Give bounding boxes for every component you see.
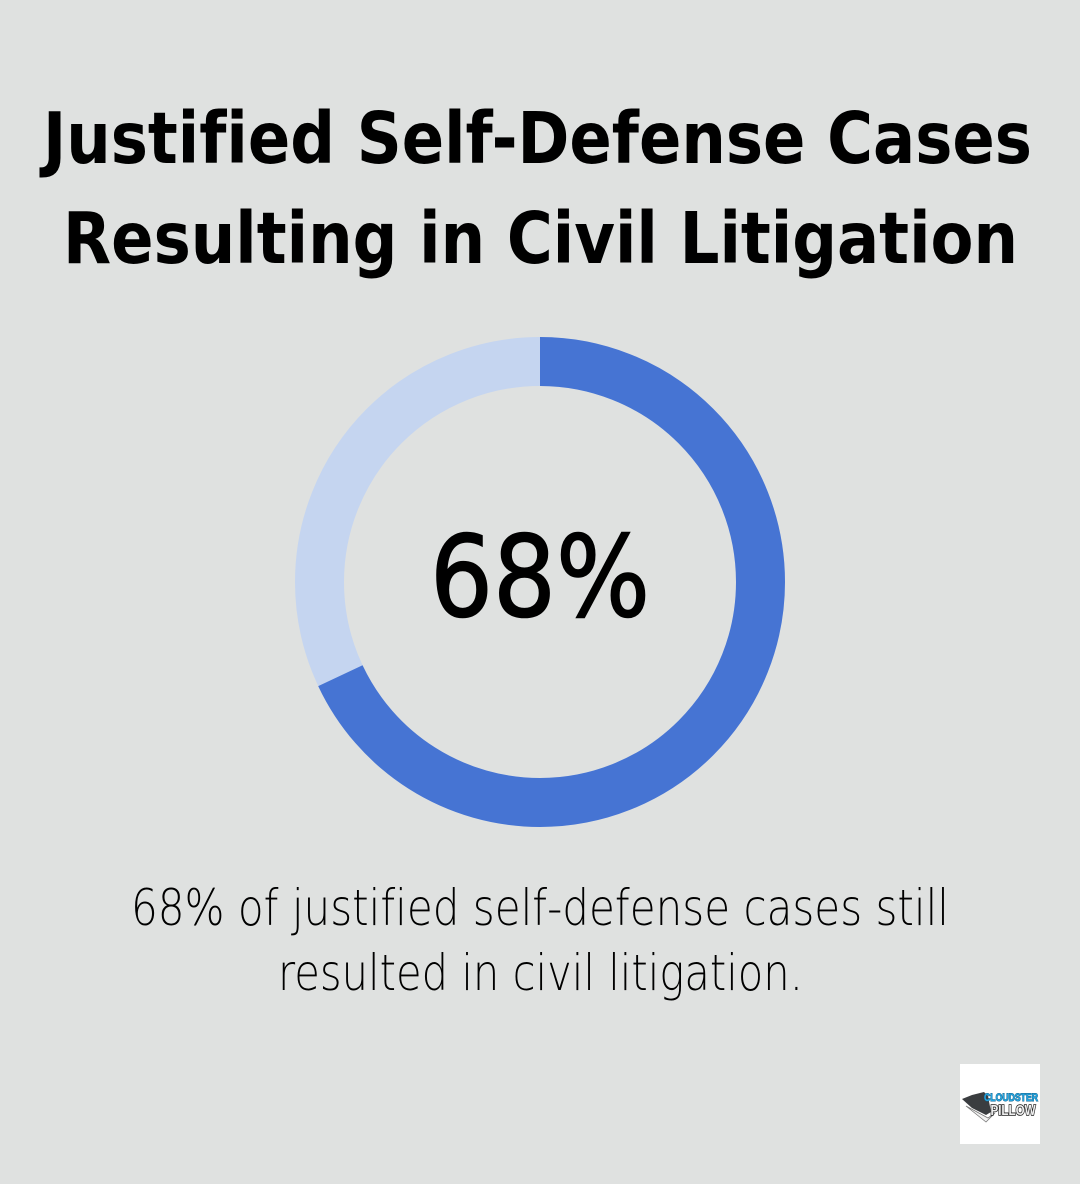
description text: 68% of justified self-defense cases still bbox=[131, 879, 949, 937]
description text: resulted in civil litigation. bbox=[278, 944, 803, 1002]
logo wordmark: PILLOW bbox=[990, 1103, 1036, 1119]
logo wordmark bbox=[984, 1092, 1038, 1119]
logo: Cloudster Pillow bbox=[960, 1064, 1040, 1144]
donut centre value: 68% bbox=[430, 513, 650, 643]
icon: pillow bbox=[962, 1092, 995, 1122]
description text bbox=[131, 879, 949, 1002]
logo wordmark: CLOUDSTER bbox=[984, 1092, 1038, 1104]
donut chart: 68% bbox=[320, 362, 760, 802]
title bbox=[39, 97, 1032, 280]
